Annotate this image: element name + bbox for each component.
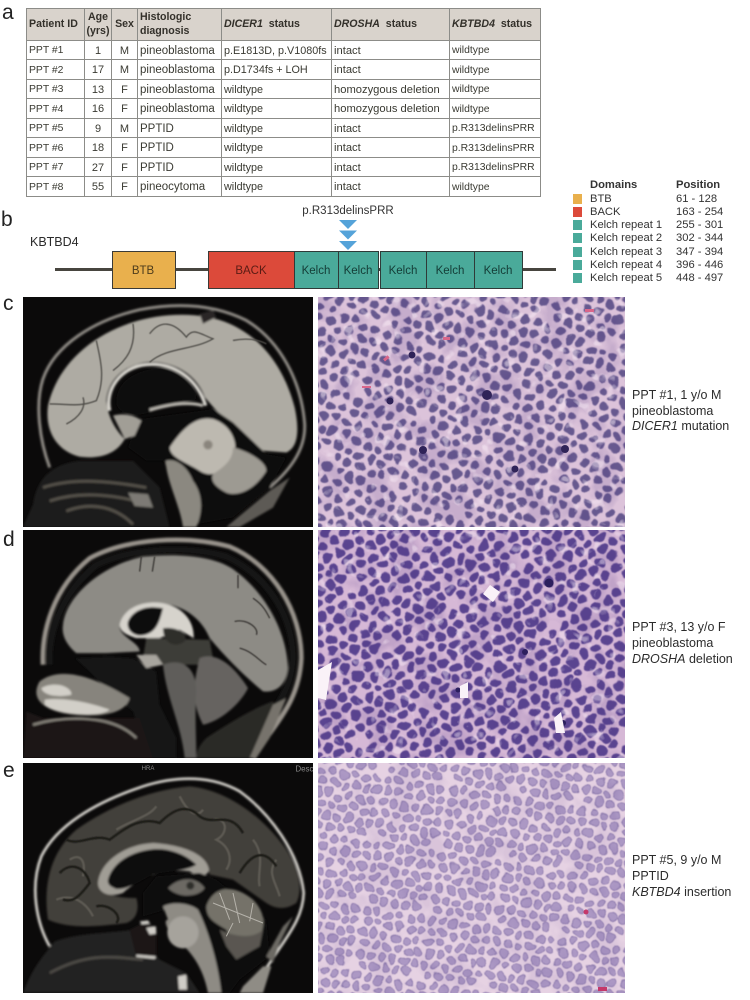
panel label e: e: [3, 759, 15, 782]
patient table: 13: [92, 84, 104, 96]
domain: BTB: [112, 252, 176, 288]
domain: Kelch repeats: Kelch: [484, 265, 512, 277]
legend rows: Kelch repeat 5: [590, 272, 662, 284]
domain: Kelch repeats: Kelch: [436, 265, 464, 277]
domain: BACK: BACK: [235, 265, 267, 277]
panel label b: b: [1, 208, 13, 231]
patient table: wildtype: [452, 104, 490, 115]
legend rows: Kelch repeat 3: [590, 246, 662, 258]
patient table: intact: [334, 162, 361, 174]
histology: case PPT #1: [318, 297, 625, 527]
legend rows: 396 - 446: [676, 259, 723, 271]
legend rows: 163 - 254: [676, 206, 723, 218]
patient table: intact: [334, 181, 361, 193]
caption: case PPT #1: DICER1 mutation: [632, 419, 729, 433]
caption: case PPT #5: [632, 853, 731, 899]
patient table: [26, 8, 541, 197]
legend rows: Kelch repeat 4: [590, 259, 662, 271]
caption: case PPT #3: DROSHA deletion: [632, 652, 733, 666]
patient table: 1: [95, 45, 101, 57]
patient table: p.R313delinsPRR: [452, 143, 535, 154]
gene label KBTBD4: KBTBD4: [30, 235, 79, 249]
domain: BTB: BTB: [132, 265, 155, 277]
caption: case PPT #5: PPTID: [632, 869, 669, 883]
patient table: (yrs): [87, 25, 109, 37]
patient table: wildtype: [224, 123, 263, 135]
legend rows: 302 - 344: [676, 232, 723, 244]
patient table: PPT #1: [29, 45, 63, 56]
domain diagram: [55, 205, 556, 289]
patient table: PPT #2: [29, 65, 63, 76]
patient table: Histologic: [140, 11, 191, 23]
legend rows: BTB: [590, 193, 612, 205]
caption: case PPT #3: [632, 620, 733, 666]
patient table: intact: [334, 45, 361, 57]
caption: case PPT #1: pineoblastoma: [632, 404, 713, 418]
patient table: 18: [92, 142, 104, 154]
MRI scan: case PPT #1: [23, 297, 313, 527]
patient table: M: [120, 64, 129, 76]
patient table: 16: [92, 103, 104, 115]
patient table: pineoblastoma: [140, 103, 215, 115]
legend rows: Position: [676, 179, 720, 191]
patient table: pineocytoma: [140, 181, 205, 193]
patient table: pineoblastoma: [140, 45, 215, 57]
caption: case PPT #5: PPT #5, 9 y/o M: [632, 853, 721, 867]
patient table: PPTID: [140, 162, 174, 174]
patient table: F: [121, 84, 128, 96]
caption: case PPT #1: PPT #1, 1 y/o M: [632, 388, 721, 402]
patient table: PPT #5: [29, 123, 63, 134]
legend rows: 61 - 128: [676, 193, 717, 205]
caption: case PPT #3: pineoblastoma: [632, 636, 713, 650]
panel label a: a: [2, 1, 14, 24]
patient table: PPT #8: [29, 182, 63, 193]
legend rows: Kelch repeat 2: [590, 232, 662, 244]
patient table: p.D1734fs + LOH: [224, 64, 308, 76]
patient table: intact: [334, 64, 361, 76]
patient table: wildtype: [224, 84, 263, 96]
patient table: DICER1 status: [224, 18, 300, 30]
patient table: M: [120, 123, 129, 135]
legend rows: [573, 179, 723, 284]
patient table: F: [121, 103, 128, 115]
scanner annotation: HRA: [142, 766, 154, 772]
patient table: diagnosis: [140, 25, 189, 37]
patient table: 27: [92, 162, 104, 174]
legend rows: BACK: [590, 206, 620, 218]
MRI scan: case PPT #5: [23, 763, 313, 993]
patient table: M: [120, 45, 129, 57]
patient table: Age: [88, 11, 108, 23]
patient table: F: [121, 181, 128, 193]
domain: BACK: [208, 252, 294, 288]
legend rows: 448 - 497: [676, 272, 723, 284]
patient table: PPT #4: [29, 104, 63, 115]
legend rows: 347 - 394: [676, 246, 723, 258]
patient table: 9: [95, 123, 101, 135]
patient table: KBTBD4 status: [452, 18, 532, 30]
patient table: wildtype: [452, 45, 490, 56]
patient table: PPT #3: [29, 84, 63, 95]
patient table: 55: [92, 181, 104, 193]
histology: case PPT #3: [318, 530, 625, 758]
caption: case PPT #5: KBTBD4 insertion: [632, 885, 731, 899]
caption: case PPT #1: [632, 388, 729, 433]
patient table: wildtype: [224, 142, 263, 154]
patient table: F: [121, 142, 128, 154]
domain: Kelch repeats: Kelch: [389, 265, 417, 277]
patient table: intact: [334, 142, 361, 154]
patient table: p.R313delinsPRR: [452, 123, 535, 134]
MRI scan: case PPT #3: [23, 530, 313, 758]
patient table: PPT #6: [29, 143, 63, 154]
patient table: Patient ID: [29, 18, 78, 30]
domain: Kelch repeats: [294, 252, 522, 288]
domain: Kelch repeats: Kelch: [344, 265, 372, 277]
patient table: Sex: [115, 18, 134, 30]
patient table: PPTID: [140, 142, 174, 154]
legend rows: 255 - 301: [676, 219, 723, 231]
patient table: 17: [92, 64, 104, 76]
patient table: p.R313delinsPRR: [452, 162, 535, 173]
panel label d: d: [3, 528, 15, 551]
legend rows: Domains: [590, 179, 637, 191]
patient table: PPTID: [140, 123, 174, 135]
panel label c: c: [3, 292, 14, 315]
patient table: wildtype: [452, 65, 490, 76]
patient table: PPT #7: [29, 162, 63, 173]
domain: Kelch repeats: Kelch: [302, 265, 330, 277]
patient table: p.E1813D, p.V1080fs: [224, 45, 327, 57]
legend rows: Kelch repeat 1: [590, 219, 662, 231]
patient table: pineoblastoma: [140, 64, 215, 76]
mutation label: p.R313delinsPRR: [302, 205, 394, 217]
patient table: homozygous deletion: [334, 103, 440, 115]
patient table: intact: [334, 123, 361, 135]
patient table: homozygous deletion: [334, 84, 440, 96]
patient table: wildtype: [452, 84, 490, 95]
domain legend: [573, 179, 723, 284]
patient table: F: [121, 162, 128, 174]
patient table: DROSHA status: [334, 18, 417, 30]
patient table: wildtype: [224, 181, 263, 193]
patient table: wildtype: [452, 182, 490, 193]
patient table: wildtype: [224, 103, 263, 115]
mutation arrowheads: [339, 220, 357, 250]
patient table: wildtype: [224, 162, 263, 174]
histology: case PPT #5: [318, 763, 625, 993]
caption: case PPT #3: PPT #3, 13 y/o F: [632, 620, 726, 634]
patient table: pineoblastoma: [140, 84, 215, 96]
